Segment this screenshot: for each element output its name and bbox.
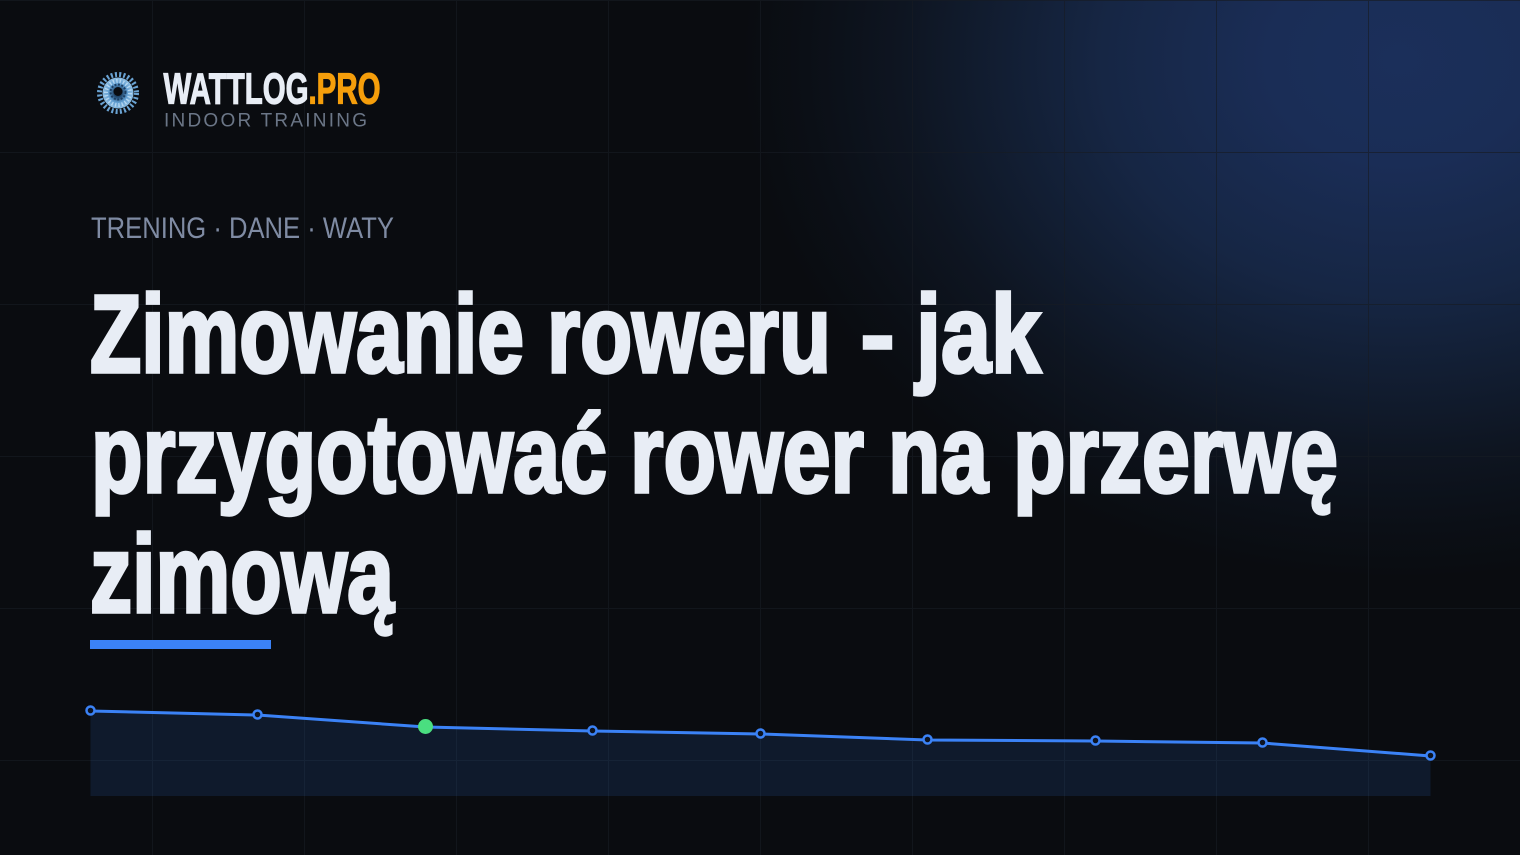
- tagline: TRENING · DANE · WATY: [91, 212, 394, 245]
- title: jak: [914, 273, 1042, 396]
- title: [90, 273, 1338, 636]
- chart area: [90, 711, 1430, 796]
- title: –: [862, 273, 893, 396]
- icon: cassette sprocket: [100, 74, 136, 112]
- title: przygotować: [91, 393, 607, 516]
- title underline: [90, 640, 271, 649]
- title: roweru: [547, 273, 831, 396]
- chart line: [90, 711, 1430, 756]
- chart points: [86, 706, 1434, 760]
- title: przerwę: [1013, 393, 1338, 516]
- logo wordmark: WATTLOG.PRO: [164, 64, 380, 114]
- title: rower: [630, 393, 864, 516]
- title: Zimowanie: [90, 273, 524, 396]
- line chart: [86, 706, 1434, 796]
- logo subtitle: INDOOR TRAINING: [164, 110, 367, 132]
- title: zimową: [90, 513, 395, 636]
- highlighted point: [418, 719, 433, 734]
- title: na: [888, 393, 989, 516]
- logo: [100, 64, 380, 132]
